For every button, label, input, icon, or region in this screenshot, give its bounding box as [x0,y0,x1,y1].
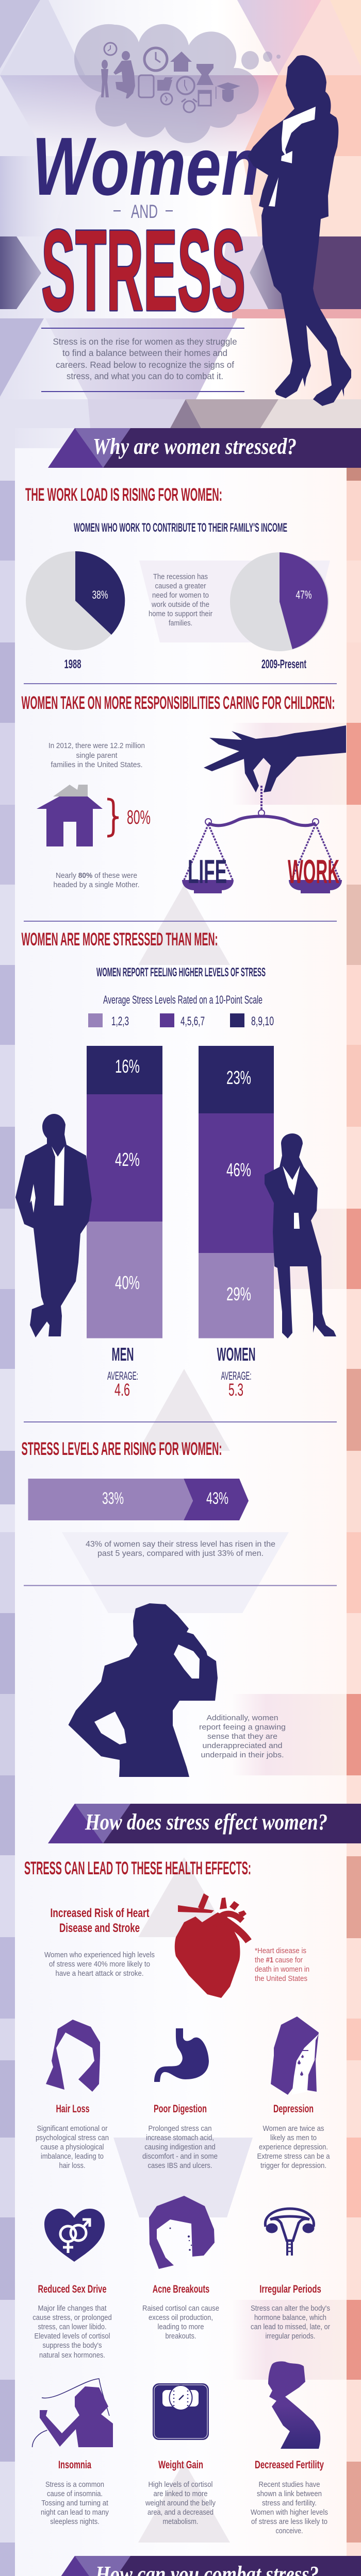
single mother text: Nearly 80% of these were [56,872,137,880]
pie chart: 1988: 38% [92,588,108,601]
effect: depression: experience depression. [259,2143,328,2151]
panel: main content background [15,448,347,2576]
intro text: to find a balance between their homes and [62,348,227,358]
effect: hair loss: cause a physiological [40,2143,104,2151]
effect: hair loss: imbalance, leading to [41,2153,104,2161]
arrow chart: 33 to 43 percent [28,1479,249,1520]
legend: 4,5,6,7 [180,1014,205,1028]
label: women average: 5.3 [228,1380,243,1400]
heart risk text: Women who experienced high levels [44,1951,155,1959]
effect: poor digestion [142,2028,218,2170]
single mother text: headed by a single Mother. [54,881,139,889]
effect: depression: trigger for depression. [260,2162,326,2170]
effect: poor digestion: discomfort - and in some [142,2153,218,2161]
arrow chart caption: 43% of women say their stress level has risen in the [86,1540,275,1549]
effect: acne breakouts [142,2196,219,2341]
intro: bottom rule [41,391,244,392]
title: and [113,201,173,222]
title: Women: Women [32,120,260,212]
effect: reduced sex drive: suppress the body's [42,2342,102,2350]
effect: reduced sex drive: stress, can lower libido. [38,2323,106,2331]
effect: decreased fertility: Decreased Fertility [255,2459,324,2471]
intro text: stress, and what you can do to combat it. [67,371,223,381]
silhouette: woman on phone [68,1603,218,1777]
icons: busy life symbols [101,43,240,112]
intro text: Stress is on the rise for women as they struggle [53,336,237,347]
effect: acne breakouts: leading to more [158,2323,204,2331]
icon: house 80 percent [37,785,103,846]
recession note: work outside of the [151,601,209,609]
effect: poor digestion: cases IBS and ulcers. [147,2162,212,2170]
recession note: The recession has [153,573,208,581]
label: men average: 4.6 [114,1380,130,1400]
effect: weight gain [145,2383,216,2526]
effect: weight gain: are linked to more [154,2490,207,2498]
stacked bar: women [199,1046,274,1338]
intro: top rule [41,328,244,329]
silhouette: standing businesswoman [248,55,351,406]
silhouette: man [15,1114,92,1337]
icon: heart [175,1893,249,1998]
effect: insomnia: Stress is a common [45,2481,104,2489]
title: and: AND [131,201,158,222]
label: men average [107,1344,138,1400]
effect: weight gain: metabolism. [163,2518,198,2526]
text: underappreciated: underpaid in their jobs. [201,1751,284,1759]
effect: depression: Depression [273,2103,314,2115]
effect: poor digestion: causing indigestion and [144,2143,216,2151]
icon: face with acne [149,2196,215,2269]
effect: insomnia: night can lead to many [41,2509,109,2517]
text: underappreciated: sense that they are [207,1733,277,1741]
stacked bar: men [87,1046,162,1338]
effect: reduced sex drive: cause stress, or prolonged [32,2314,112,2322]
stacked bar: men: 42% [115,1149,140,1170]
effect: decreased fertility: stress and fertility. [262,2499,317,2507]
recession note [149,573,212,628]
effect: weight gain: weight around the belly [145,2499,216,2507]
effect: acne breakouts: breakouts. [165,2332,196,2341]
effect: poor digestion: increase stomach acid, [146,2134,214,2142]
effect: poor digestion: Poor Digestion [154,2103,207,2115]
effect: depression: Women are twice as [263,2125,324,2133]
section banner: How can you combat stress? [48,2556,361,2576]
pie chart: 1988: 1988 [64,657,81,671]
pie chart: 1988 [26,551,125,671]
icon: scale [153,2383,209,2440]
effect: acne breakouts: Acne Breakouts [153,2283,209,2295]
arrow chart caption: past 5 years, compared with just 33% of men. [97,1549,264,1558]
pie chart: 2009-present: 47% [296,588,311,601]
effect: irregular periods: hormone balance, which [254,2314,326,2322]
label: life: LIFE [188,853,227,890]
effect: reduced sex drive [32,2209,112,2360]
effect: irregular periods: Irregular Periods [259,2283,321,2295]
label: women average [217,1344,256,1400]
heart disease footnote [255,1947,309,1983]
stacked bar: women: 23% [226,1067,251,1088]
heart risk text [44,1906,155,1978]
recession note: home to support their [149,610,212,618]
stacked bar: women: 29% [226,1283,251,1304]
pie chart: 2009-present [230,552,329,671]
effect: decreased fertility [251,2361,328,2535]
icon: stomach [154,2028,209,2082]
label: women average: WOMEN [217,1344,256,1365]
heart risk text: Increased Risk of Heart [51,1906,150,1920]
icon: uterus [265,2209,314,2256]
icon: pregnant woman [268,2361,320,2449]
effect: hair loss: hair loss. [59,2162,86,2170]
legend [88,1013,274,1028]
single parent text [48,742,145,769]
effect: hair loss [36,2020,109,2170]
silhouette: woman in dress [265,1133,336,1338]
effect: depression: Extreme stress can be a [257,2153,330,2161]
label: women average: AVERAGE: [221,1369,252,1382]
section banner: Why are women stressed? [48,428,361,468]
arrow chart: 33 to 43 percent: 43% [206,1489,228,1507]
section banner: How does stress effect women? [48,1804,361,1843]
heart risk text: Disease and Stroke [59,1921,140,1935]
effect: reduced sex drive: natural sex hormones. [39,2351,105,2360]
intro text: careers. Read below to recognize the signs of [56,360,234,370]
pie chart: 2009-present: 2009-Present [261,657,306,671]
effect: depression [257,2016,330,2170]
effect: irregular periods [251,2209,330,2341]
effect: hair loss: Hair Loss [56,2103,90,2115]
effect: reduced sex drive: Elevated levels of cortisol [34,2332,110,2341]
heart disease footnote: death in women in [255,1965,309,1974]
icon: crying woman [271,2016,319,2095]
recession note: families. [169,619,192,628]
legend: 1,2,3 [111,1014,129,1028]
single parent text: families in the United States. [51,761,142,769]
text: underappreciated: report feeing a gnawing [199,1723,286,1732]
intro text [53,336,237,381]
text: underappreciated [199,1714,286,1759]
single mother text [54,872,139,889]
heart disease footnote: the #1 cause for [255,1956,303,1964]
heart risk text: of stress were 40% more likely to [49,1960,150,1969]
chart subtitle: Average Stress Levels Rated on a 10-Point Scale [103,993,262,1006]
effect: weight gain: High levels of cortisol [149,2481,212,2489]
effect: acne breakouts: Raised cortisol can cause [142,2304,219,2313]
text: underappreciated: underappreciated and [202,1742,283,1750]
illustration: hand holding scale [182,725,346,893]
effect: insomnia: cause of insomnia. [47,2490,103,2498]
section banner: Why are women stressed?: Why are women stressed? [93,434,297,459]
effect: insomnia: Insomnia [58,2459,91,2471]
effect: insomnia: Tossing and turning at [41,2499,108,2507]
effect: reduced sex drive: Major life changes that [38,2304,106,2313]
effect: insomnia [32,2379,113,2526]
effect: reduced sex drive: Reduced Sex Drive [38,2283,106,2295]
effect: weight gain: Weight Gain [158,2459,203,2471]
effect: decreased fertility: Women with higher levels [251,2509,328,2517]
bracket and 80 percent [107,799,151,836]
effect: acne breakouts: excess oil production, [149,2314,213,2322]
legend: 8,9,10 [251,1014,274,1028]
thought cloud [74,24,281,143]
label: men average: AVERAGE: [107,1369,138,1382]
recession note: caused a greater [155,582,206,590]
recession note: need for women to [152,591,209,600]
effect: irregular periods: can lead to missed, late, or [251,2323,330,2331]
single parent text: single parent [76,752,118,760]
effect: decreased fertility: of stress are less likely to [251,2518,327,2526]
stacked bar: women: 46% [226,1159,251,1180]
heart disease footnote: the United States [255,1975,307,1983]
effect: hair loss: Significant emotional or [37,2125,108,2133]
effect: irregular periods: Stress can alter the body's [251,2304,330,2313]
right side strip [347,428,361,2576]
arrow chart caption [86,1540,275,1558]
effect: decreased fertility: conceive. [275,2527,303,2535]
effect: decreased fertility: shown a link between [257,2490,322,2498]
effect: hair loss: psychological stress can [36,2134,109,2142]
effect: weight gain: area, and a decreased [147,2509,214,2517]
icon: hair [46,2020,100,2092]
stacked bar: men: 16% [115,1056,140,1077]
bracket and 80 percent: 80% [127,807,151,828]
icon: woman on pillow [32,2379,113,2447]
effect: decreased fertility: Recent studies have [259,2481,320,2489]
heart disease footnote: *Heart disease is [255,1947,306,1955]
effect: depression: likely as men to [270,2134,317,2142]
label: men average: MEN [111,1344,134,1365]
stacked bar: men: 40% [115,1272,140,1293]
single parent text: In 2012, there were 12.2 million [48,742,145,750]
heart risk text: have a heart attack or stroke. [56,1970,143,1978]
effect: irregular periods: irregular periods. [265,2332,316,2341]
left side strip [0,428,15,2576]
text: underappreciated: Additionally, women [206,1714,278,1722]
arrow chart: 33 to 43 percent: 33% [102,1489,124,1507]
icon: heart with gender symbols [44,2209,105,2262]
effect: poor digestion: Prolonged stress can [149,2125,211,2133]
effect: insomnia: sleepless nights. [50,2518,100,2526]
